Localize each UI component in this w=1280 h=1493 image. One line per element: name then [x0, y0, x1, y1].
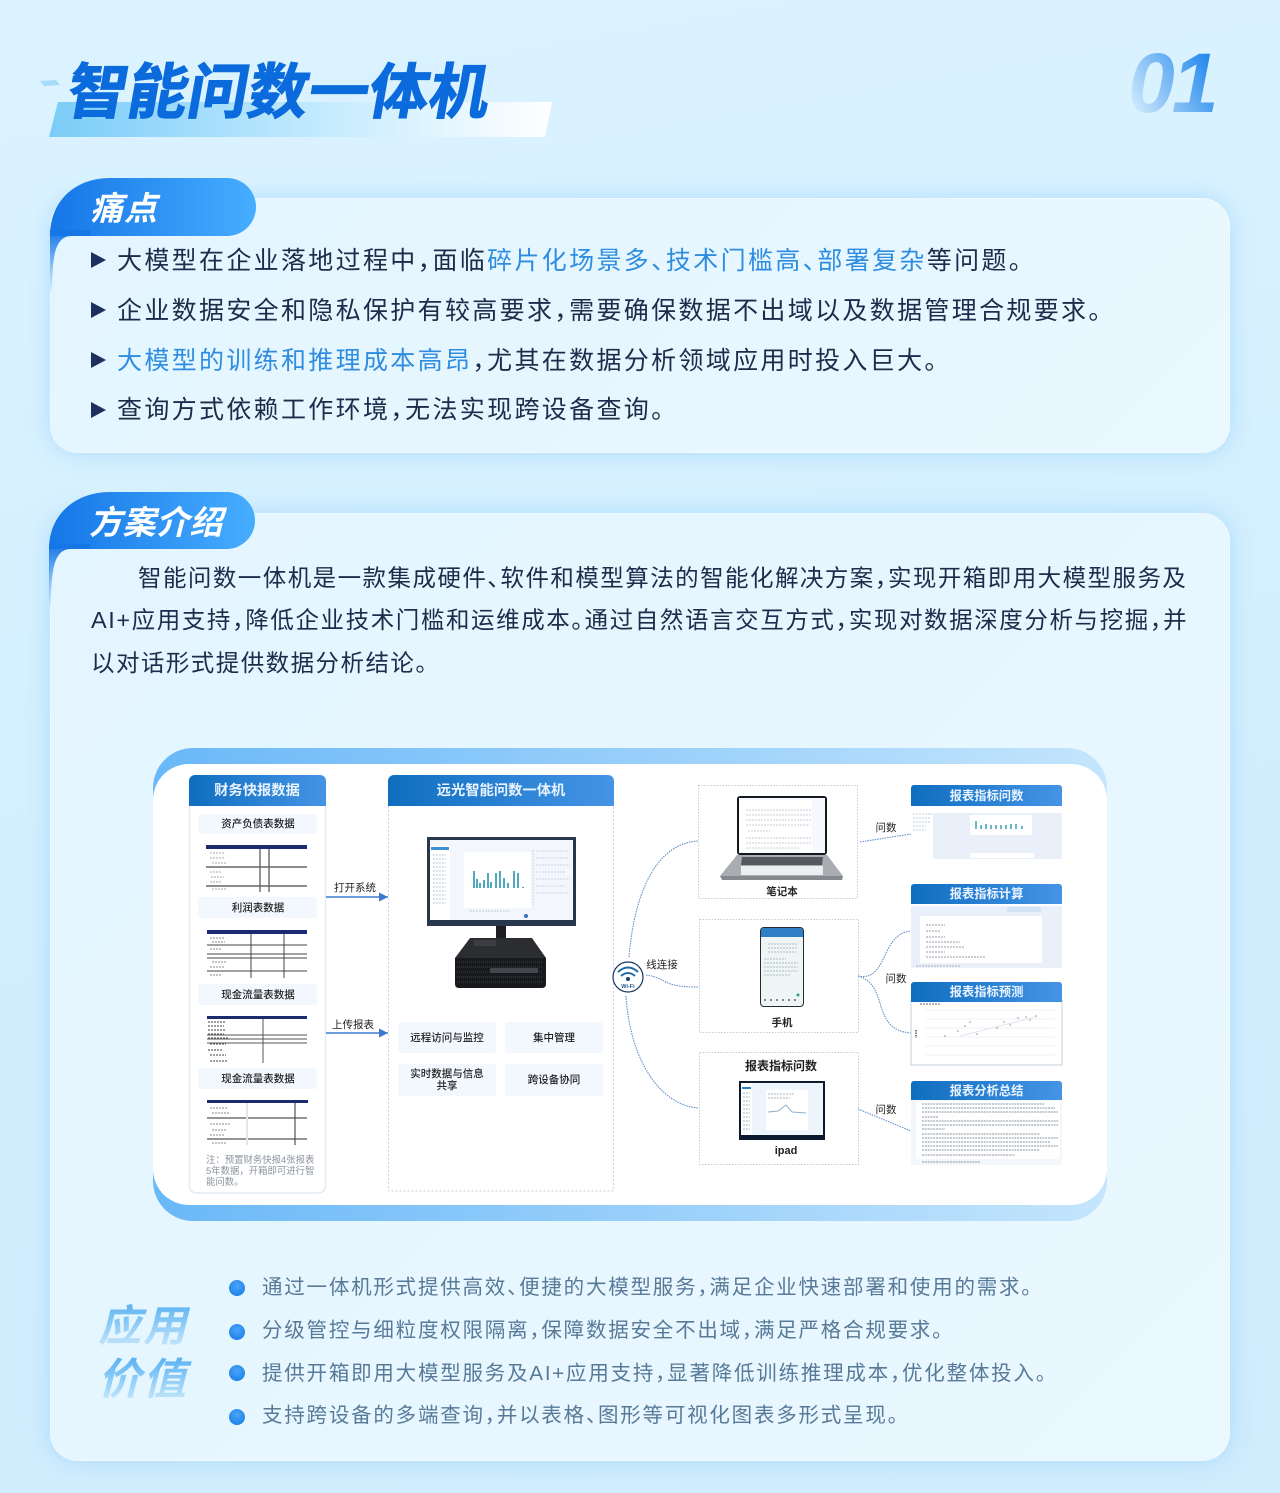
column: financial data: 财务快报数据	[214, 781, 300, 799]
tab: solution	[49, 492, 255, 606]
box: laptop: 笔记本	[766, 885, 798, 898]
pain points list	[91, 247, 1103, 424]
feature: real-time sharing	[398, 1064, 496, 1096]
arrow: upload report: 上传报表	[332, 1018, 374, 1031]
label: connection: 线连接	[646, 958, 678, 971]
column: financial data	[189, 775, 326, 1193]
diagram frame	[153, 748, 1107, 1221]
note: 注：预置财务快报4张报表	[206, 1154, 315, 1165]
feature: central management	[505, 1022, 603, 1053]
pain points list: 查询方式依赖工作环境，无法实现跨设备查询。	[117, 396, 666, 424]
data item: cash flow statement: 现金流量表数据	[221, 988, 295, 1001]
data item: cash flow statement 2	[198, 1068, 317, 1145]
label: ask: 问数	[886, 972, 907, 985]
box: ipad: 报表指标问数	[745, 1058, 817, 1073]
note	[206, 1154, 315, 1187]
data item: income statement	[198, 897, 317, 978]
card: report query: 报表指标问数	[950, 788, 1024, 803]
box: ipad: ipad	[775, 1145, 797, 1157]
tab: pain points	[50, 178, 256, 292]
feature: real-time sharing: 共享	[436, 1079, 458, 1092]
data item: balance sheet	[198, 814, 317, 892]
feature: real-time sharing: 实时数据与信息	[410, 1067, 484, 1080]
label: ask: 问数	[876, 821, 897, 834]
label: ask: 问数	[876, 1103, 897, 1116]
data item: cash flow statement	[198, 984, 317, 1063]
title underline bar	[40, 80, 552, 137]
solution paragraph: 以对话形式提供数据分析结论。	[91, 650, 429, 676]
note: 能问数。	[206, 1176, 244, 1187]
solution paragraph: AI+应用支持，降低企业技术门槛和运维成本。通过自然语言交互方式，实现对数据深度分析与挖掘，并	[91, 607, 1188, 633]
icon: wifi	[613, 962, 643, 992]
value list: 通过一体机形式提供高效、便捷的大模型服务，满足企业快速部署和使用的需求。	[262, 1276, 1033, 1299]
solution paragraph: 智能问数一体机是一款集成硬件、软件和模型算法的智能化解决方案，实现开箱即用大模型服务及	[138, 565, 1187, 591]
box: ipad	[700, 1052, 858, 1164]
column: all-in-one machine: 远光智能问数一体机	[437, 781, 566, 799]
tab heading: pain points: 痛点	[90, 190, 158, 227]
title: 智能问数一体机	[62, 59, 496, 126]
column: all-in-one machine	[388, 775, 614, 1191]
value heading: 应用	[98, 1303, 188, 1351]
value heading	[98, 1301, 202, 1407]
panel: pain points	[50, 198, 1230, 453]
feature: device collaboration: 跨设备协同	[528, 1073, 580, 1086]
arrow: open system	[326, 881, 388, 897]
data item: balance sheet: 资产负债表数据	[221, 817, 295, 830]
card: report calculation: 报表指标计算	[950, 886, 1023, 901]
feature: remote access	[398, 1022, 496, 1053]
pain points list: 大模型在企业落地过程中，面临碎片化场景多、技术门槛高、部署复杂等问题。	[117, 247, 1024, 275]
section number: 01	[1128, 36, 1215, 130]
solution paragraph	[91, 565, 1188, 676]
feature: device collaboration	[505, 1064, 603, 1096]
note: 5年数据，开箱即可进行智	[206, 1165, 314, 1176]
panel: solution and value	[50, 513, 1230, 1461]
value list: 分级管控与细粒度权限隔离，保障数据安全不出域，满足严格合规要求。	[262, 1319, 944, 1342]
value list	[229, 1276, 1048, 1427]
feature: central management: 集中管理	[533, 1031, 575, 1044]
box: laptop	[698, 786, 858, 898]
data item: income statement: 利润表数据	[232, 901, 285, 914]
value heading: 价值	[98, 1356, 188, 1404]
box: phone	[700, 920, 858, 1032]
box: phone: 手机	[772, 1016, 793, 1029]
connectors	[626, 834, 911, 1131]
card: report calculation	[911, 884, 1062, 968]
data item: cash flow statement 2: 现金流量表数据	[221, 1072, 295, 1085]
card: report summary: 报表分析总结	[950, 1083, 1023, 1098]
pain points list: 大模型的训练和推理成本高昂，尤其在数据分析领域应用时投入巨大。	[117, 347, 939, 375]
value list: 支持跨设备的多端查询，并以表格、图形等可视化图表多形式呈现。	[262, 1404, 900, 1427]
arrow: upload report	[326, 1018, 388, 1033]
card: report query	[911, 785, 1062, 859]
card: report summary	[911, 1081, 1062, 1165]
arrow: open system: 打开系统	[334, 881, 376, 894]
pain points list: 企业数据安全和隐私保护有较高要求，需要确保数据不出域以及数据管理合规要求。	[117, 297, 1103, 325]
icon: wifi: Wi-Fi	[621, 984, 635, 990]
tab heading: solution: 方案介绍	[89, 504, 223, 541]
icon: desktop computer	[427, 837, 576, 988]
card: report forecast: 报表指标预测	[950, 984, 1023, 999]
card: report forecast	[911, 982, 1062, 1065]
value list: 提供开箱即用大模型服务及AI+应用支持，显著降低训练推理成本，优化整体投入。	[262, 1362, 1048, 1385]
feature: remote access: 远程访问与监控	[410, 1031, 484, 1044]
